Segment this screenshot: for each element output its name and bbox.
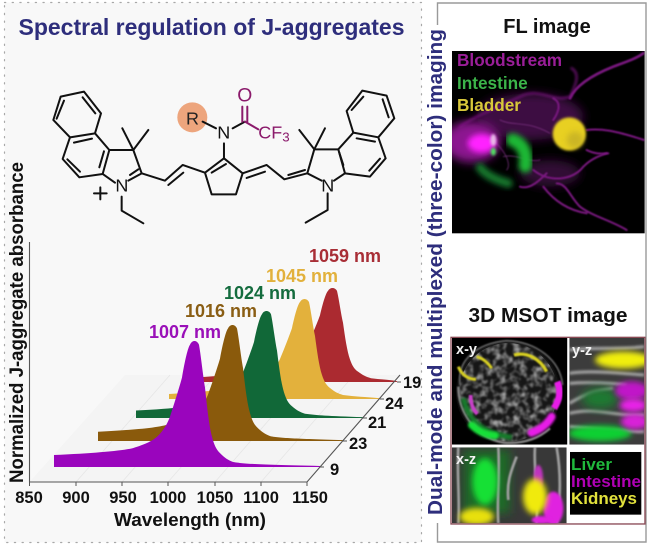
label: Bloodstream: Bloodstream bbox=[457, 50, 562, 70]
x tick labels bbox=[15, 489, 328, 507]
label: Intestine: Intestine bbox=[457, 73, 528, 93]
chemical structure bbox=[53, 86, 394, 223]
panel: y-z slice bbox=[568, 338, 650, 445]
x tick labels: 1050 bbox=[197, 489, 233, 507]
depth labels bbox=[330, 374, 421, 479]
x tick labels: 1000 bbox=[150, 489, 186, 507]
peak label 1016 nm: 1016 nm bbox=[185, 301, 257, 321]
vertical heading: Dual-mode and multiplexed (three-color) imaging bbox=[425, 29, 447, 515]
chemical structure: O bbox=[237, 86, 252, 107]
x tick labels: 1100 bbox=[243, 489, 279, 507]
depth labels: 9 bbox=[330, 461, 339, 479]
chemical structure: N bbox=[217, 122, 230, 142]
depth labels: 19 bbox=[403, 374, 421, 392]
chart floor bbox=[30, 375, 400, 482]
panel: imaging frame bbox=[438, 3, 646, 542]
curve: 1059 nm bbox=[198, 288, 397, 382]
curve: 1007 nm bbox=[54, 341, 320, 467]
MSOT image panel bbox=[451, 337, 650, 525]
chemical structure: CF bbox=[258, 122, 282, 142]
chemical structure: R bbox=[186, 108, 199, 128]
chemical structure: N bbox=[115, 175, 128, 195]
panel: spectral regulation background bbox=[4, 2, 422, 542]
curve: 1045 nm bbox=[169, 299, 380, 399]
peak label 1059 nm: 1059 nm bbox=[309, 246, 381, 266]
label: x-y: x-y bbox=[456, 342, 477, 358]
label: x-z: x-z bbox=[456, 452, 476, 468]
depth labels: 23 bbox=[349, 435, 367, 453]
panel: x-z slice bbox=[452, 447, 567, 525]
chemical structure: N bbox=[321, 175, 334, 195]
axes bbox=[30, 242, 401, 482]
legend box bbox=[570, 452, 641, 515]
depth labels: 21 bbox=[368, 414, 386, 432]
heading: FL image: FL image bbox=[503, 16, 591, 38]
x tick labels: 1150 bbox=[292, 489, 328, 507]
title: Spectral regulation of J-aggregates bbox=[18, 14, 405, 40]
curve: 1024 nm bbox=[136, 311, 363, 418]
y axis label: Normalized J-aggregate absorbance bbox=[7, 162, 28, 483]
peak label 1045 nm: 1045 nm bbox=[266, 266, 338, 286]
3D spectra chart bbox=[15, 242, 421, 507]
panel: x-y slice bbox=[452, 338, 567, 445]
legend: Intestine: Intestine bbox=[571, 472, 641, 491]
label: Bladder: Bladder bbox=[457, 95, 521, 115]
curve: 1016 nm bbox=[98, 325, 343, 441]
legend: Kidneys: Kidneys bbox=[571, 489, 637, 508]
x axis label: Wavelength (nm) bbox=[114, 509, 266, 530]
peak label 1007 nm: 1007 nm bbox=[149, 322, 221, 342]
label: y-z: y-z bbox=[572, 343, 592, 359]
x tick labels: 950 bbox=[109, 489, 137, 507]
chemical structure: 3 bbox=[282, 130, 290, 145]
depth labels: 24 bbox=[385, 395, 404, 413]
heading: 3D MSOT image: 3D MSOT image bbox=[468, 305, 628, 327]
x tick labels: 850 bbox=[15, 489, 43, 507]
FL image bbox=[443, 51, 645, 233]
peak label 1024 nm: 1024 nm bbox=[224, 283, 296, 303]
x tick labels: 900 bbox=[62, 489, 90, 507]
legend: Liver: Liver bbox=[571, 455, 612, 474]
